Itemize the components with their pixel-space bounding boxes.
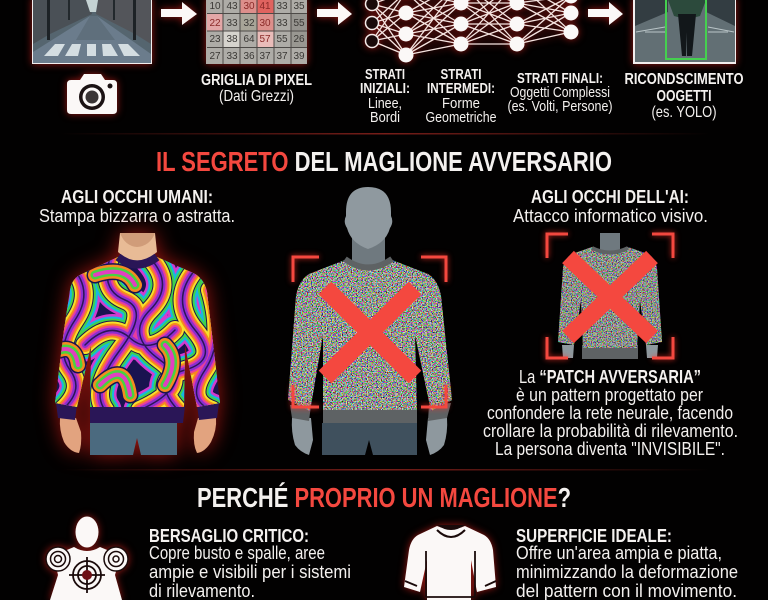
text: critical target: [149, 526, 351, 600]
text: adversarial patch: confondere la rete neurale, facendo: [487, 403, 733, 423]
chart: pixel grid: 36: [243, 51, 255, 62]
chart: pixel grid: 43: [226, 1, 238, 12]
heading: why a sweater: PERCHÉ PROPRIO UN MAGLIONE?: [197, 482, 571, 513]
arrow 1: [161, 2, 197, 25]
chart: pixel grid: 37: [259, 51, 271, 62]
chart: pixel grid: [206, 0, 307, 64]
label: initial layers: Linee,: [368, 96, 402, 112]
label: initial layers: Bordi: [370, 110, 400, 126]
chart: pixel grid: 64: [243, 34, 255, 45]
text: adversarial patch: [483, 367, 738, 459]
label: object recognition: (es. YOLO): [652, 104, 716, 121]
label: final layers: [508, 71, 612, 115]
chart: pixel grid: 30: [259, 18, 271, 29]
panel: AI eyes: [483, 187, 738, 459]
chart: pixel grid: 33: [276, 1, 288, 12]
image: street photo: [32, 0, 152, 64]
text: human eyes: [39, 187, 235, 226]
label: final layers: (es. Volti, Persone): [508, 99, 612, 115]
chart: pixel grid: 57: [259, 34, 271, 45]
chart: pixel grid: 10: [209, 1, 221, 12]
label: object recognition: RICONDSCIMENTO: [624, 71, 744, 88]
chart: pixel grid: 30: [243, 1, 255, 12]
arrow 3: [588, 2, 623, 25]
text: adversarial patch: La “PATCH AVVERSARIA”: [519, 367, 701, 387]
text: adversarial patch: è un pattern progettato per: [516, 385, 703, 405]
chart: pixel grid: 33: [226, 18, 238, 29]
chart: pixel grid: 55: [293, 18, 305, 29]
label: initial layers: [360, 67, 410, 126]
figure: grey mannequin: [285, 187, 455, 455]
chart: pixel grid: 55: [276, 34, 288, 45]
chart: pixel grid: 27: [209, 51, 221, 62]
cross: red X: [325, 288, 415, 377]
label: object recognition: OOGETTI: [656, 88, 712, 105]
text: AI eyes: AGLI OCCHI DELL'AI:: [531, 187, 689, 207]
panel: adversarial figure: [285, 187, 455, 455]
label: final layers: Oggetti Complessi: [510, 85, 610, 101]
chart: pixel grid: 23: [209, 34, 221, 45]
chart: pixel grid: 22: [209, 18, 221, 29]
chart: pixel grid: 37: [276, 51, 288, 62]
text: ideal surface: [516, 526, 738, 600]
chart: pixel grid: 33: [276, 18, 288, 29]
chart: pixel grid: 26: [293, 34, 305, 45]
text: critical target: ampie e visibili per i sistemi: [149, 562, 351, 582]
label: initial layers: STRATI: [365, 67, 405, 83]
text: ideal surface: minimizzando la deformazione: [516, 562, 738, 582]
text: AI eyes: Attacco informatico visivo.: [513, 206, 708, 226]
detection box: corners: [293, 257, 446, 407]
icon: camera: [67, 74, 117, 114]
label: pixel grid: GRIGLIA DI PIXEL: [201, 72, 312, 89]
label: intermediate layers: STRATI: [440, 67, 482, 83]
label: intermediate layers: Forme: [442, 96, 480, 112]
chart: pixel grid: 33: [226, 51, 238, 62]
image: object detection: [633, 0, 736, 64]
chart: pixel grid: 41: [259, 1, 271, 12]
cross: red X: [568, 257, 652, 337]
text: human eyes: Stampa bizzarra o astratta.: [39, 206, 235, 226]
text: critical target: Copre busto e spalle, aree: [149, 543, 325, 563]
chart: pixel grid: 38: [226, 34, 238, 45]
panel: ideal surface: [404, 525, 738, 600]
text: adversarial patch: La persona diventa "INVISIBILE".: [495, 439, 725, 459]
chart: neural network: [366, 0, 578, 62]
icon: body with targets: [46, 516, 128, 600]
figure: AI view sweater: [555, 233, 665, 359]
label: intermediate layers: Geometriche: [426, 110, 496, 126]
text: AI eyes: [513, 187, 708, 226]
text: ideal surface: Offre un'area ampia e piatta,: [516, 543, 722, 563]
text: human eyes: AGLI OCCHI UMANI:: [61, 187, 213, 207]
label: intermediate layers: INTERMEDI:: [427, 81, 495, 97]
arrow 2: [317, 2, 352, 25]
label: final layers: STRATI FINALI:: [517, 71, 603, 87]
label: intermediate layers: [426, 67, 496, 126]
heading: secret of the adversarial sweater: IL SEGRETO DEL MAGLIONE AVVERSARIO: [156, 146, 612, 177]
panel: human eyes: [39, 187, 235, 455]
chart: pixel grid: 39: [293, 51, 305, 62]
label: pixel grid: (Dati Grezzi): [219, 88, 294, 105]
label: pixel grid: [201, 72, 312, 105]
text: adversarial patch: crollare la probabilità di rilevamento.: [483, 421, 738, 441]
label: object recognition: [624, 71, 744, 121]
chart: pixel grid: 35: [293, 1, 305, 12]
panel: CNN pipeline: [32, 0, 744, 126]
text: ideal surface: SUPERFICIE IDEALE:: [516, 526, 672, 546]
icon: sweater: [404, 525, 496, 600]
text: critical target: BERSAGLIO CRITICO:: [149, 526, 309, 546]
panel: critical target: [46, 516, 351, 600]
chart: pixel grid: 32: [243, 18, 255, 29]
detection box: corners: [547, 234, 673, 358]
figure: colourful sweater: [50, 233, 225, 455]
label: initial layers: INIZIALI:: [360, 81, 410, 97]
